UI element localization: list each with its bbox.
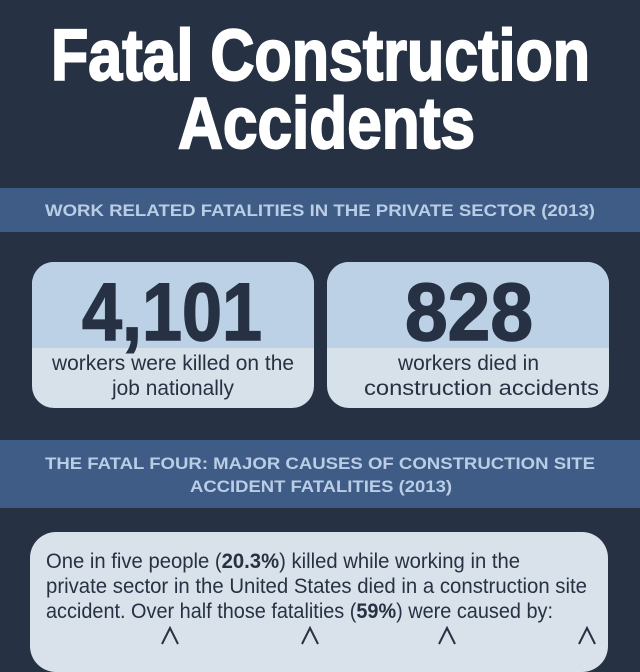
banner: private sector: WORK RELATED FATALITIES IN THE PRIVATE SECTOR (2013): [45, 201, 595, 220]
card: 828: 828: [405, 267, 533, 358]
paragraph panel: One in five people (20.3%) killed while working in the: [46, 550, 520, 573]
banner: fatal four: [0, 440, 640, 508]
card: 4,101: workers were killed on the: [51, 352, 294, 375]
paragraph panel: [30, 532, 608, 672]
paragraph panel: private sector in the United States died in a construction site: [46, 575, 587, 598]
banner: fatal four: THE FATAL FOUR: MAJOR CAUSES OF CONSTRUCTION SITE: [45, 454, 595, 473]
banner: private sector: [0, 188, 640, 232]
card: 4,101: [32, 262, 314, 408]
title: [51, 16, 590, 160]
banner: fatal four: ACCIDENT FATALITIES (2013): [190, 477, 452, 496]
paragraph panel: accident. Over half those fatalities (59%) were caused by:: [46, 600, 553, 623]
card: 828: [327, 262, 609, 408]
card: 4,101: job nationally: [111, 377, 234, 400]
card: 4,101: 4,101: [82, 267, 262, 358]
card: 828: workers died in: [397, 352, 539, 375]
card: 828: construction accidents: [364, 377, 599, 400]
